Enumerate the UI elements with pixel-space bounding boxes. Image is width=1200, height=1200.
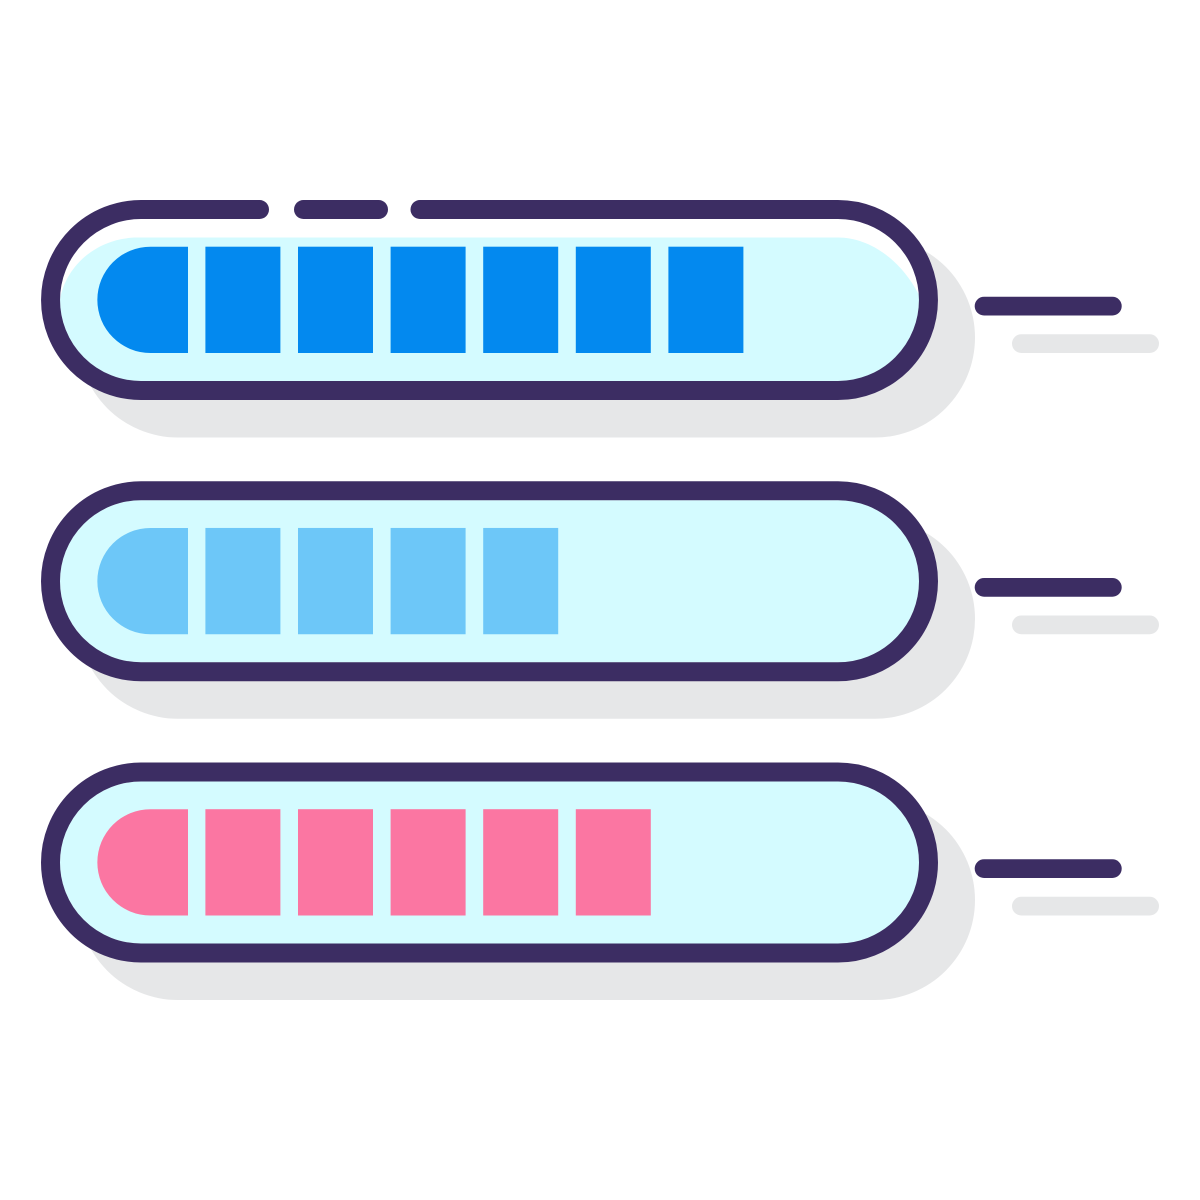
segments bbox=[97, 247, 743, 353]
bar cyan fill bbox=[60, 782, 919, 944]
label shadow line bbox=[1012, 334, 1159, 353]
bar white interior bbox=[60, 219, 919, 381]
label shadow line bbox=[1012, 897, 1159, 916]
panel: bottom progress bar, pink, six segments bbox=[50, 772, 1159, 1000]
progress bars infographic bbox=[41, 200, 1159, 1000]
bar outline with gaps bbox=[51, 210, 928, 390]
panel: middle progress bar, light blue, five segments bbox=[50, 491, 1159, 719]
bar outline bbox=[50, 491, 928, 672]
panel: top progress bar, dark blue, seven segments bbox=[51, 210, 1159, 438]
label line bbox=[975, 297, 1122, 316]
label line bbox=[975, 859, 1122, 878]
label shadow line bbox=[1012, 615, 1159, 634]
bar cyan fill bbox=[55, 238, 925, 390]
segments bbox=[97, 809, 651, 916]
shadow bbox=[78, 238, 975, 438]
shadow bbox=[78, 800, 975, 1000]
shadow bbox=[78, 519, 975, 719]
label line bbox=[975, 578, 1122, 597]
bar outline bbox=[50, 772, 928, 953]
bar cyan fill bbox=[60, 500, 919, 662]
segments bbox=[97, 528, 558, 634]
